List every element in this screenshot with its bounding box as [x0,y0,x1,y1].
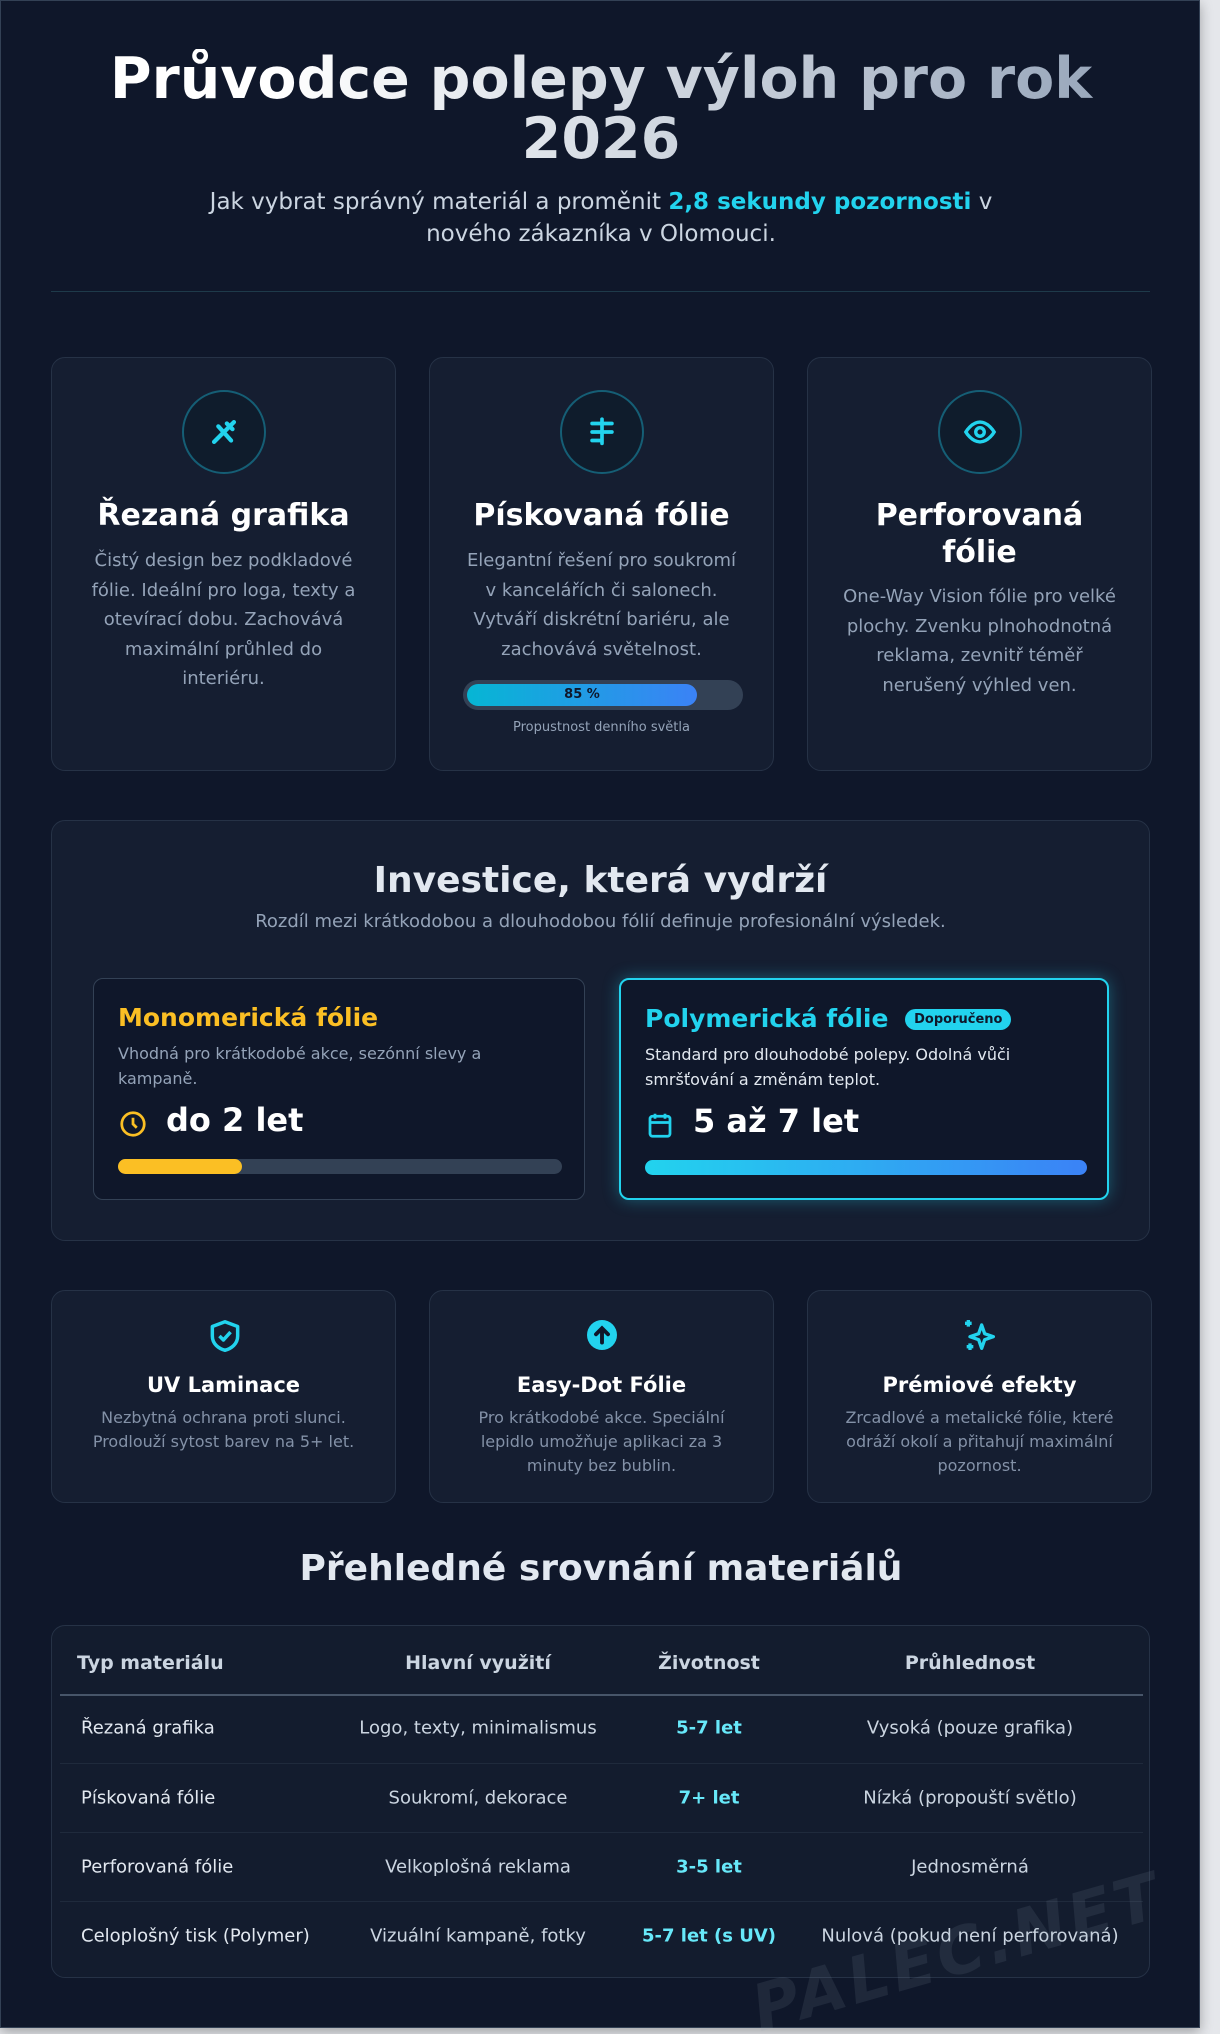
card: Polymerická [619,978,1109,1200]
text: Zrcadlové a metalické fólie, které odráží okolí a přitahují maximální pozornost. [845,1408,1114,1475]
heading: Pískovaná fólie [473,498,730,533]
panel: Prémiové efekty [807,1290,1152,1503]
icon: calendar [648,1114,672,1138]
card: Polymerická: Standard pro dlouhodobé polepy. Odolná vůči smršťování a změnám teplot. [645,1045,1010,1089]
text: One-Way Vision fólie pro velké plochy. Zvenku plnohodnotná reklama, zevnitř téměř nerušený výhled ven. [843,586,1116,696]
panel: Easy-Dot [429,1290,774,1503]
card: Monomerická [93,978,585,1200]
heading [876,498,1083,570]
icon: lines [560,390,644,474]
card: Polymerická: 5 až 7 let [693,1102,859,1140]
heading: UV Laminace [147,1373,300,1397]
table: 7+ let [679,1788,739,1808]
card: Monomerická: Monomerická fólie [118,1003,378,1032]
table: Průhlednost [905,1652,1035,1674]
table: Soukromí, dekorace [389,1788,567,1808]
table: Vizuální kampaně, fotky [370,1926,586,1946]
table: Životnost [658,1652,760,1674]
card: Polymerická: Polymerická fólie [645,1004,888,1033]
panel: Řezaná grafika [51,357,396,771]
table: Nízká (propouští světlo) [863,1788,1077,1808]
card: Monomerická: Vhodná pro krátkodobé akce, sezónní slevy a kampaně. [118,1044,481,1088]
card: Polymerická: Doporučeno [914,1012,1002,1027]
title: 2026 [522,106,680,172]
progress bar [463,680,743,710]
title [61,49,1141,169]
table [51,1625,1150,1978]
row 3: Perforovaná fólie [81,1856,233,1878]
icon: upload [587,1320,617,1350]
progress bar: 85 % [564,687,600,702]
heading: Řezaná grafika [97,498,350,533]
icon: cut [182,390,266,474]
card: Monomerická: do 2 let [166,1101,303,1139]
table: Vysoká (pouze grafika) [867,1718,1073,1738]
subtitle: Jak vybrat správný materiál a proměnit 2,8 sekundy pozornosti v nového zákazníka v Olomouci. [210,189,992,247]
panel: Pískovaná fólie [429,357,774,771]
table: 5-7 let [676,1718,742,1738]
heading: Easy-Dot Fólie [517,1373,686,1397]
icon: shield [210,1320,240,1352]
row 2: Pískovaná fólie [81,1788,215,1808]
heading: Perforovaná [876,498,1083,533]
table: 3-5 let [676,1856,742,1878]
text: Elegantní řešení pro soukromí v kancelářích či salonech. Vytváří diskrétní bariéru, ale zachovává světelnost. [467,550,736,660]
heading: fólie [942,535,1017,570]
text: Pro krátkodobé akce. Speciální lepidlo umožňuje aplikaci za 3 minuty bez bublin. [478,1408,725,1475]
row 1: Řezaná grafika [81,1718,215,1738]
table: Velkoplošná reklama [385,1856,571,1878]
heading: Investice, která vydrží [374,860,827,901]
table: Nulová (pokud není perforovaná) [821,1926,1119,1946]
text: Čistý design bez podkladové fólie. Ideální pro loga, texty a otevírací dobu. Zachovává maximální průhled do interiéru. [92,550,355,689]
icon: clock [120,1111,146,1137]
table: Jednosměrná [911,1856,1029,1878]
bar [645,1160,1087,1175]
heading: Prémiové efekty [882,1373,1077,1397]
table: Hlavní využití [405,1652,551,1674]
panel: Investice [51,820,1150,1241]
title: Průvodce polepy výloh pro rok [110,46,1092,112]
table: Typ materiálu [77,1652,224,1674]
table: 5-7 let (s UV) [642,1926,776,1946]
bar [118,1159,562,1174]
panel: UV Laminace [51,1290,396,1503]
icon: sparkles [965,1320,995,1350]
text: Nezbytná ochrana proti slunci. Prodlouží sytost barev na 5+ let. [93,1408,354,1451]
bar label: Propustnost denního světla [513,720,690,735]
table: Logo, texty, minimalismus [359,1718,597,1738]
subheading: Rozdíl mezi krátkodobou a dlouhodobou fólií definuje profesionální výsledek. [255,911,946,932]
icon: eye [938,390,1022,474]
row 4: Celoplošný tisk (Polymer) [81,1926,310,1946]
panel: Perforovaná fólie [807,357,1152,771]
heading: table: Přehledné srovnání materiálů [300,1548,902,1589]
